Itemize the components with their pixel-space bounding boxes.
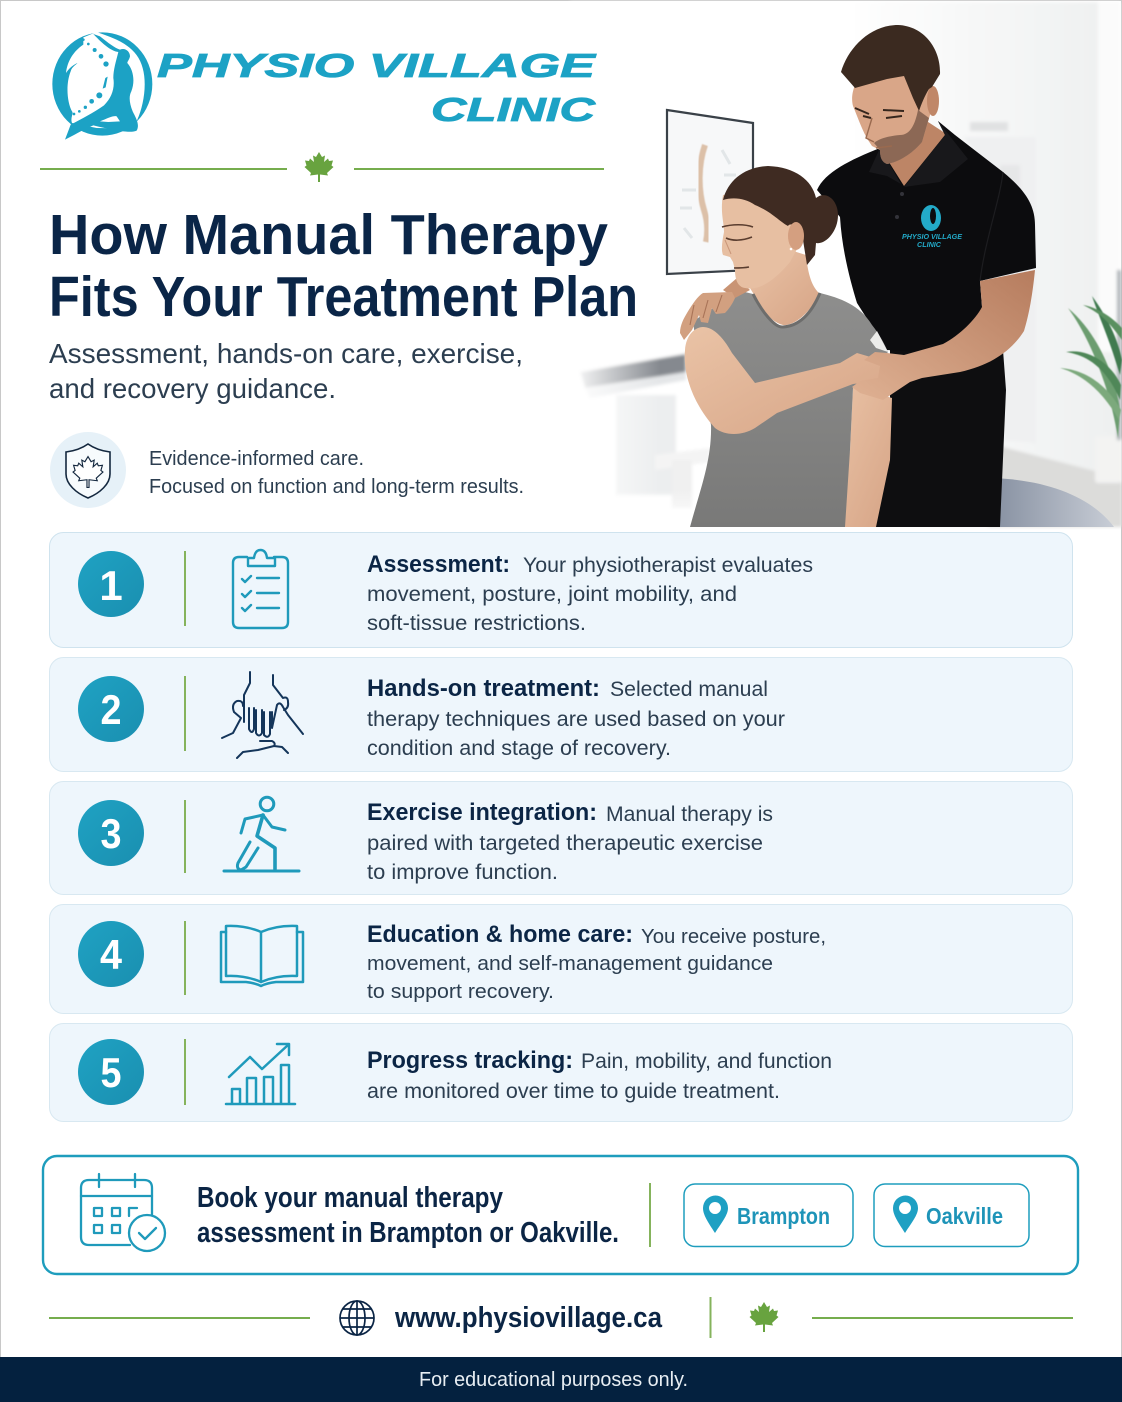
number 4 bbox=[78, 921, 144, 987]
step 2 text bbox=[367, 675, 785, 760]
therapist head bbox=[841, 25, 940, 164]
booking text: Book your manual therapy bbox=[197, 1182, 503, 1214]
step 4 text bbox=[367, 921, 826, 1003]
shirt placket buttons bbox=[895, 192, 904, 219]
patient near arm bbox=[685, 327, 884, 434]
icon: clipboard checklist bbox=[233, 550, 288, 628]
number 1: 1 bbox=[99, 562, 123, 609]
logo wordmark: PHYSIO VILLAGE bbox=[157, 47, 597, 84]
step 1 text bbox=[367, 551, 813, 635]
panel: booking call to action bbox=[43, 1156, 1078, 1274]
shoulder highlight bbox=[870, 331, 888, 352]
step 3 text: paired with targeted therapeutic exercise bbox=[367, 831, 763, 855]
shirt logo bbox=[902, 205, 962, 249]
footer disclaimer bar bbox=[0, 1357, 1122, 1402]
step 5 text bbox=[367, 1047, 832, 1103]
step 3 text: Exercise integration: bbox=[367, 799, 597, 826]
header divider with maple leaf bbox=[40, 152, 604, 182]
icon: maple leaf bbox=[750, 1302, 778, 1332]
step 4 text: You receive posture, bbox=[641, 925, 826, 948]
panel: step 5 progress tracking bbox=[50, 1024, 1072, 1122]
title: Fits Your Treatment Plan bbox=[49, 265, 638, 329]
icon: shield with maple leaf bbox=[50, 432, 126, 508]
number 2 bbox=[78, 676, 144, 742]
icon: maple leaf bbox=[304, 152, 334, 182]
therapist polo shirt bbox=[817, 121, 1036, 358]
subtitle: Assessment, hands-on care, exercise, bbox=[49, 338, 523, 369]
website address: www.physiovillage.ca bbox=[394, 1302, 663, 1334]
title: How Manual Therapy bbox=[49, 203, 608, 267]
finger lines bbox=[690, 295, 722, 325]
icon: globe bbox=[340, 1301, 374, 1335]
patient far arm bbox=[834, 387, 892, 527]
website row bbox=[49, 1297, 1073, 1338]
number 5 bbox=[78, 1039, 144, 1105]
button: Oakville bbox=[874, 1184, 1029, 1246]
logo mark: figure in circle bbox=[52, 32, 152, 140]
panel: step 4 education and home care bbox=[50, 904, 1072, 1014]
bottom fade bbox=[570, 490, 700, 527]
therapist arm and hand on elbow bbox=[852, 270, 1035, 400]
step 4 text: Education & home care: bbox=[367, 921, 633, 948]
therapist hand on shoulder bbox=[680, 292, 735, 340]
patient neck bbox=[745, 250, 820, 325]
patient head bbox=[722, 166, 838, 288]
logo wordmark second line: CLINIC bbox=[431, 91, 597, 128]
step 3 text: to improve function. bbox=[367, 860, 558, 884]
step 2 text: Selected manual bbox=[610, 677, 768, 701]
step 1 text: Your physiotherapist evaluates bbox=[523, 553, 813, 577]
hero photo: therapist treating patient's shoulder bbox=[570, 2, 1122, 527]
step 2 text: Hands-on treatment: bbox=[367, 675, 600, 702]
left fade bbox=[570, 340, 660, 527]
shirt logo: CLINIC bbox=[917, 242, 942, 249]
icon: hands bbox=[222, 672, 303, 758]
panel: step 2 hands-on treatment bbox=[50, 658, 1072, 772]
stool bbox=[990, 478, 1114, 527]
evidence statement: Evidence-informed care. bbox=[149, 448, 364, 470]
clinic room background bbox=[570, 2, 1122, 527]
icon: open book bbox=[221, 926, 303, 986]
evidence statement bbox=[149, 448, 524, 498]
icon: calendar with check bbox=[81, 1174, 165, 1251]
panel: step 3 exercise integration bbox=[50, 782, 1072, 894]
number 2: 2 bbox=[100, 686, 122, 733]
step 1 text: soft-tissue restrictions. bbox=[367, 611, 586, 635]
step 3 text: Manual therapy is bbox=[606, 802, 773, 826]
step 5 text: are monitored over time to guide treatment. bbox=[367, 1079, 780, 1103]
title bbox=[49, 203, 638, 329]
number 1 bbox=[78, 551, 144, 617]
wall chart of the spine bbox=[667, 110, 753, 274]
footer disclaimer bar: For educational purposes only. bbox=[419, 1369, 688, 1391]
therapist neck bbox=[876, 120, 948, 187]
icon: rising bar chart bbox=[226, 1044, 295, 1104]
button: Oakville: Oakville bbox=[926, 1203, 1003, 1229]
number 3 bbox=[78, 800, 144, 866]
panel: step 1 assessment bbox=[50, 532, 1072, 648]
sleeve seam bbox=[980, 172, 1003, 281]
button: Brampton: Brampton bbox=[737, 1203, 830, 1229]
logo bbox=[52, 32, 597, 140]
patient grey t-shirt bbox=[690, 292, 888, 527]
step 3 text bbox=[367, 799, 773, 884]
step 1 text: Assessment: bbox=[367, 551, 510, 578]
therapist trousers bbox=[873, 350, 1006, 527]
booking text: assessment in Brampton or Oakville. bbox=[197, 1217, 619, 1249]
number 4: 4 bbox=[100, 931, 123, 978]
step 4 text: movement, and self-management guidance bbox=[367, 952, 773, 975]
step 5 text: Progress tracking: bbox=[367, 1047, 573, 1074]
therapist forearm behind patient neck bbox=[723, 278, 750, 298]
shirt logo: PHYSIO VILLAGE bbox=[902, 234, 962, 241]
step 4 text: to support recovery. bbox=[367, 980, 554, 1003]
subtitle bbox=[49, 338, 523, 404]
evidence statement: Focused on function and long-term results. bbox=[149, 476, 524, 498]
icon: walking figure bbox=[224, 797, 299, 871]
plant bbox=[1060, 296, 1122, 438]
step 2 text: condition and stage of recovery. bbox=[367, 736, 671, 760]
step 2 text: therapy techniques are used based on your bbox=[367, 707, 785, 731]
step 5 text: Pain, mobility, and function bbox=[581, 1049, 832, 1073]
number 3: 3 bbox=[100, 810, 122, 857]
button: Brampton bbox=[684, 1184, 853, 1246]
step 1 text: movement, posture, joint mobility, and bbox=[367, 582, 737, 606]
booking text bbox=[197, 1182, 619, 1249]
subtitle: and recovery guidance. bbox=[49, 373, 336, 404]
t-shirt neckband bbox=[753, 293, 820, 327]
shirt collar bbox=[869, 121, 968, 187]
number 5: 5 bbox=[100, 1049, 122, 1096]
